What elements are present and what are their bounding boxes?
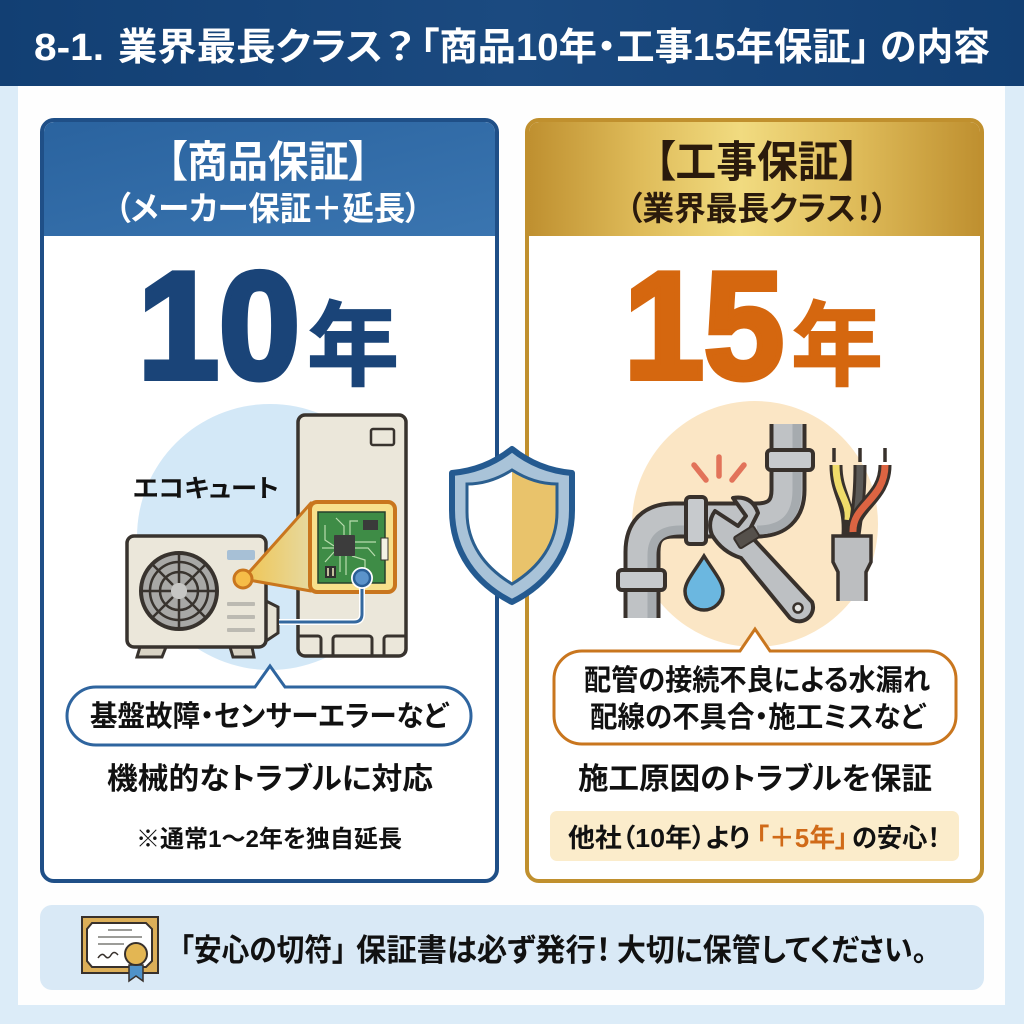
speech bubble: construction issues: 配線の不具合・施工ミスなど [590,701,927,734]
speech bubble: product issues: 基盤故障・センサーエラーなど [90,700,450,733]
panel header: product warranty: （メーカー保証＋延長） [115,190,421,227]
title bar: 8-1. [34,27,104,69]
icon: sparks [694,457,744,480]
panel: construction warranty [527,120,982,881]
callout: plus five years: 他社（10年）より [568,823,750,853]
icon: shield [452,449,572,602]
text: keep certificate: 「安心の切符」 [180,933,346,968]
title bar [0,0,1024,86]
callout: plus five years [550,811,959,861]
storage tank [298,415,406,656]
title bar: 業界最長クラス [118,27,383,69]
text: workmanship trouble: 施工原因のトラブルを保証 [578,762,932,796]
speech bubble: construction issues [554,629,956,744]
icon: leaking pipe [618,424,813,618]
title bar: ？ [386,27,414,69]
panel header: product warranty: 【商品保証】 [167,139,369,187]
text: keep certificate [180,933,927,968]
text: keep certificate: 大切に保管してください。 [617,933,927,968]
icon: wrench [710,498,813,621]
speech bubble: construction issues: 配管の接続不良による水漏れ [584,664,930,697]
icon: cut wires [833,448,885,601]
illustration: EcoCute unit and circuit board [127,404,406,670]
panel header: product warranty [44,122,495,236]
callout: plus five years: 「＋5年」 [756,823,848,853]
text: mechanical trouble: 機械的なトラブルに対応 [107,762,433,796]
footer banner [40,905,984,990]
big number: 15 years: 15 [624,241,784,411]
big number: 10 years: 年 [307,296,399,398]
title bar: 「商品10年・工事15年保証」 [420,27,870,69]
note: warranty extension: ※通常1～2年を独自延長 [136,826,402,853]
panel header: construction warranty [529,122,980,236]
text label: EcoCute: エコキュート [133,475,279,503]
big number: 15 years: 年 [791,296,883,398]
speech bubble: product issues [67,666,471,745]
panel: product warranty [42,120,497,881]
big number: 10 years: 10 [138,241,300,411]
title bar: の内容 [880,27,990,69]
icon: water drop [685,556,723,610]
panel header: construction warranty: 【工事保証】 [655,139,859,187]
callout: plus five years: の安心！ [852,823,940,853]
big number: 15 years [624,241,883,411]
panel header: construction warranty: （業界最長クラス！） [626,190,888,227]
illustration: pipes, wrench and wires [618,401,885,647]
big number: 10 years [138,241,399,411]
outdoor unit [127,536,278,657]
magnified circuit board callout [234,502,395,622]
icon: warranty certificate [82,917,158,981]
text: keep certificate: 保証書は必ず発行！ [356,933,611,968]
